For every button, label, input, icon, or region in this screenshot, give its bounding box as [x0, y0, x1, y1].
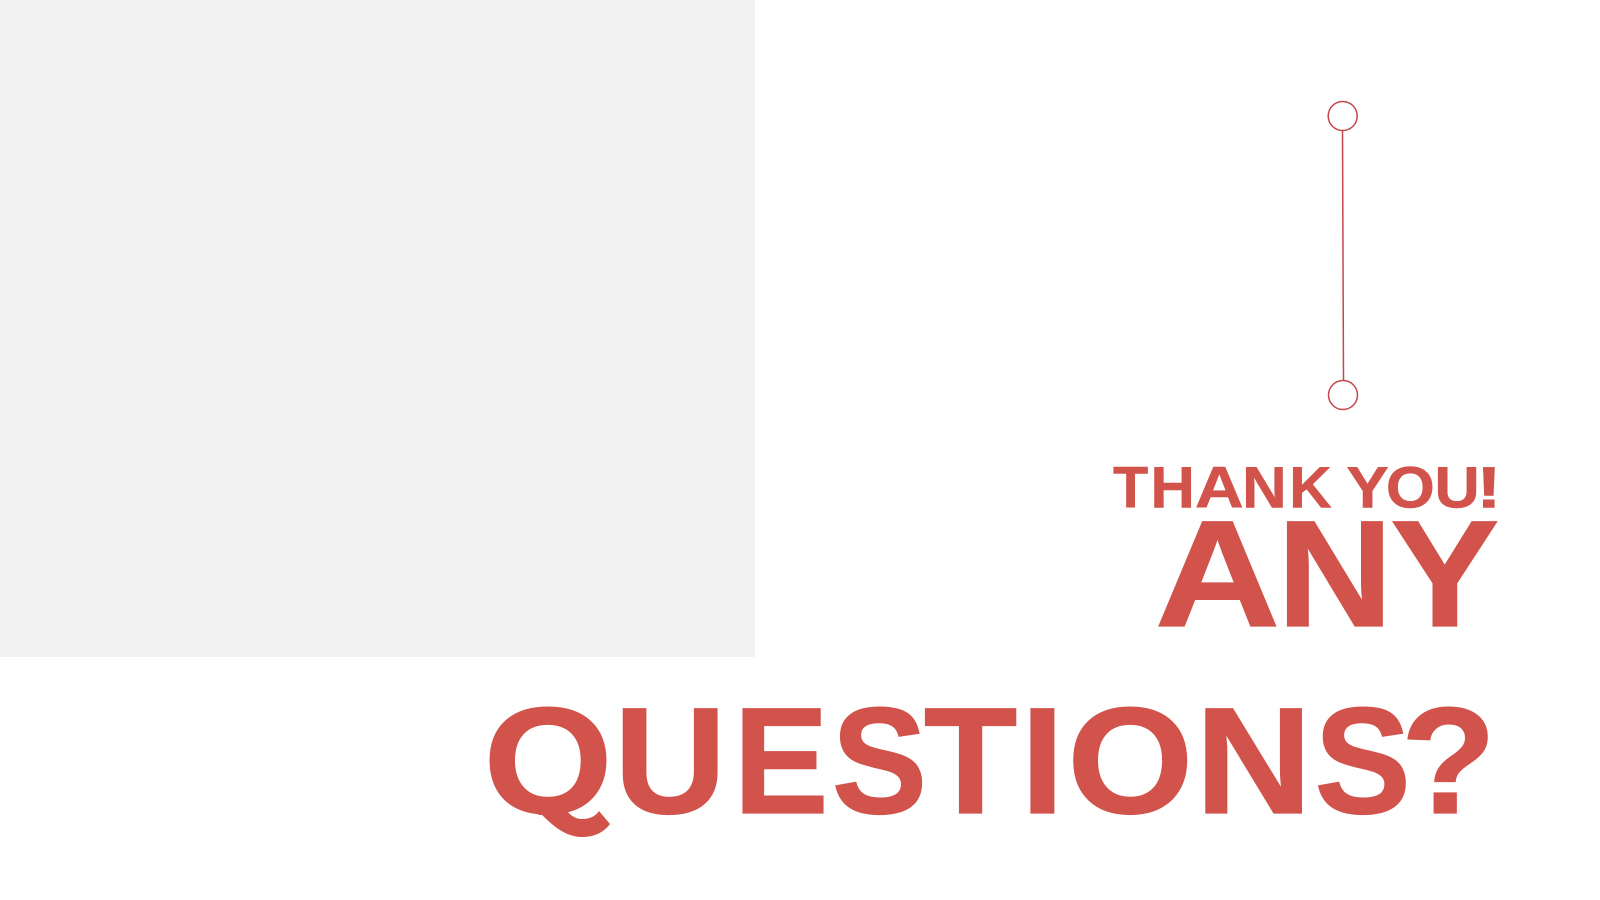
heading: questions: S [832, 677, 927, 846]
heading: questions: Q [483, 676, 613, 845]
heading: questions [490, 706, 1488, 837]
heading: thank you: T [1113, 455, 1148, 521]
heading: thank you: ! [1476, 455, 1502, 520]
heading: any: A [1155, 488, 1280, 659]
heading: any [1155, 488, 1499, 659]
heading: thank you: U [1434, 454, 1480, 520]
heading: thank you: N [1242, 454, 1287, 520]
heading: thank you: K [1289, 456, 1332, 520]
heading: questions: U [614, 676, 726, 846]
heading: questions: O [1067, 677, 1193, 846]
heading: questions: S [1314, 677, 1411, 846]
icon: connector line with two circles [1328, 102, 1358, 410]
image placeholder panel [0, 0, 755, 657]
heading: questions: ? [1401, 676, 1496, 846]
heading: any: N [1277, 489, 1393, 659]
heading: questions: I [1020, 676, 1064, 845]
heading: thank you: H [1150, 454, 1195, 520]
heading: questions: E [734, 677, 829, 846]
heading: questions: T [924, 677, 1017, 846]
heading: questions: N [1195, 677, 1312, 846]
heading: any: Y [1390, 489, 1499, 659]
heading: thank you: A [1195, 456, 1244, 520]
heading: thank you: Y [1346, 455, 1389, 520]
heading: thank you: O [1386, 454, 1435, 520]
heading: thank you [1113, 454, 1502, 521]
